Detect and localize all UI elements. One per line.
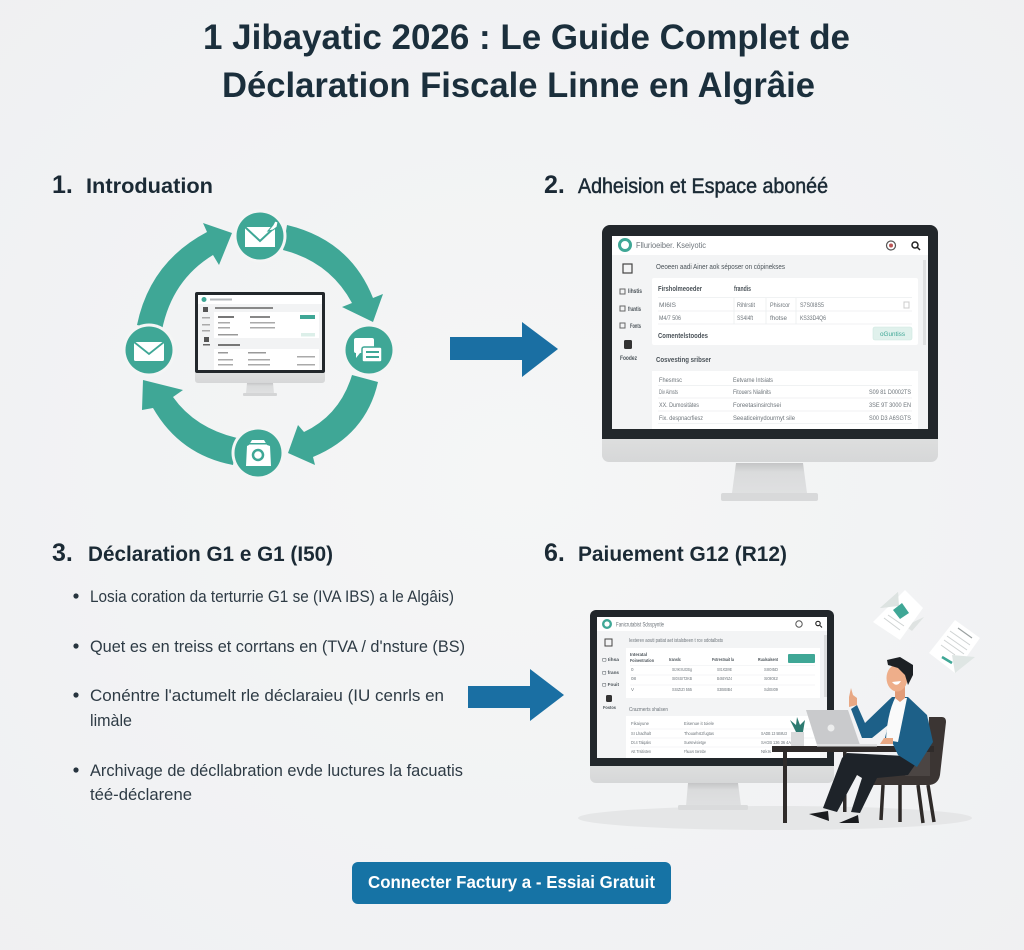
payment screen: SAGB 136 36 4A <box>761 740 791 745</box>
payment screen: ▢ Fouit <box>602 682 620 687</box>
bullet 4 <box>73 762 463 804</box>
floating document 1 <box>873 590 924 640</box>
data card: Comentelstoodes <box>658 333 708 340</box>
payment screen: Iranslc <box>669 657 681 662</box>
heading: section 1: Introduation <box>86 175 213 198</box>
payment screen: S0I0I2 <box>764 676 779 681</box>
payment screen: ▢ Iihsa <box>602 657 620 662</box>
title: 1 Jibayatic 2026 : Le Guide Complet de <box>203 18 850 57</box>
table card <box>652 371 918 429</box>
ground shadow <box>578 806 972 830</box>
payment screen: Fanicrutabist Sdsspyntle <box>616 622 664 628</box>
scrollbar <box>923 260 926 345</box>
payment illustration <box>578 590 980 830</box>
bullet 4: Archivage de décllabration evde luctures la facuatis <box>90 762 463 780</box>
arm <box>851 697 896 742</box>
table card: Fitouers Nialinits <box>733 389 772 396</box>
payment screen: Eisenue it toiele <box>684 721 714 726</box>
large monitor: subscriber portal <box>602 225 938 501</box>
arrow: left to top <box>137 223 232 330</box>
smile <box>892 681 901 685</box>
monitor bezel <box>602 225 938 439</box>
payment screen: Rualsalsent <box>758 657 778 662</box>
payment screen: 08 <box>631 676 637 681</box>
payment screen <box>597 617 827 758</box>
icon: bag with camera <box>232 426 284 480</box>
payment screen: Fostos <box>603 705 616 710</box>
person <box>809 657 933 823</box>
call to action button <box>352 862 671 904</box>
table card: XX. Dumositätes <box>659 402 700 409</box>
payment screen: SI Lhadhalt <box>631 731 652 736</box>
data card: KS33D4Q6 <box>800 315 826 322</box>
heading: section 2: Adheision et Espace abonéé <box>578 175 828 198</box>
payment screen: SdISI09 <box>764 687 778 692</box>
title: Déclaration Fiscale Linne en Algrâie <box>222 66 815 105</box>
payment screen: Fstrestnait la <box>712 657 734 662</box>
data card: fhotse <box>770 315 787 322</box>
arrow: bottom to left <box>142 380 237 465</box>
bullet 3: limàle <box>90 712 132 730</box>
sidebar: Fonts <box>630 324 641 330</box>
monitor base <box>721 493 818 501</box>
data card: MI6IS <box>659 302 677 309</box>
bullet 4: téé-déclarene <box>90 786 192 804</box>
monitor bezel <box>590 610 834 766</box>
monitor chin <box>590 766 834 783</box>
payment screen: Interatal <box>630 652 647 657</box>
data card: frandis <box>734 286 751 293</box>
arrow: right to bottom <box>288 375 378 465</box>
arrow: cycle to portal <box>450 322 558 377</box>
bullet 1: Losia coration da terturrie G1 se (IVA IBS) a le Algâis) <box>90 588 454 606</box>
monitor base <box>678 805 748 810</box>
sidebar: Foodez <box>620 355 638 362</box>
payment screen: V <box>631 687 634 692</box>
heading: section 1 <box>52 171 213 199</box>
torso jacket <box>892 697 933 767</box>
hair <box>887 657 913 685</box>
sidebar: Iihstis <box>628 289 643 295</box>
table card: Fix. despnacrfiesz <box>659 415 703 422</box>
desk <box>772 746 934 823</box>
arrow: top to right <box>283 225 383 322</box>
heading: section 3: 3. <box>52 539 73 567</box>
payment screen: Suetevisietge <box>684 740 706 745</box>
monitor stand <box>732 463 807 493</box>
icon: envelope <box>122 324 176 376</box>
top bar: Fllurioeiber. Kseiyotic <box>636 241 706 250</box>
bullet list <box>73 588 465 804</box>
legs <box>823 753 915 813</box>
data card: SS4I4ft <box>737 315 753 322</box>
sidebar: frantis <box>628 307 641 313</box>
table card: Foreetasinsirchsei <box>733 402 781 409</box>
bullet 2: Quet es en treiss et corrtans en (TVA / d'nsture (BS) <box>90 638 465 656</box>
shirt <box>886 698 907 742</box>
screen heading: Oeoeen aadi Ainer aok séposer on cópinekses <box>656 262 785 271</box>
hand on laptop <box>880 738 893 744</box>
top bar <box>612 236 928 255</box>
heading: section 2 <box>544 171 828 199</box>
payment screen: S01Xt2I9E <box>717 667 732 672</box>
second heading: Cosvesting sribser <box>656 355 711 364</box>
neck <box>895 686 905 702</box>
payment screen: Thouarhstzfugtas <box>684 731 715 736</box>
heading: section 3: Déclaration G1 e G1 (I50) <box>88 543 333 566</box>
floating document 2 <box>929 620 980 673</box>
heading: section 6: 6. <box>544 539 565 567</box>
payment screen: AIt Trsitisten <box>631 749 651 754</box>
data card: Firsholmeoeder <box>658 286 702 293</box>
payment screen: Foinentration <box>630 658 654 663</box>
payment screen: Dt.4 Talqaks <box>631 740 652 745</box>
payment screen: Crazmerts shalsen <box>629 707 668 713</box>
data card: M4/7 506 <box>659 315 681 322</box>
data card: Rihlrstit <box>737 302 755 309</box>
payment screen: 0 <box>631 667 634 672</box>
payment screen: Fikaiyune <box>631 721 649 726</box>
data card: Phisrcor <box>770 302 791 309</box>
head <box>886 664 908 692</box>
payment screen: S3BIBIB4 <box>717 687 732 692</box>
heading: section 6: Paiuement G12 (R12) <box>578 543 787 566</box>
payment screen: SII0I5D <box>764 667 779 672</box>
plant <box>790 717 805 746</box>
raised hand <box>849 688 857 707</box>
sidebar <box>620 264 643 362</box>
payment screen: SADB 13 5B8U3 <box>761 731 787 736</box>
table card: Div Aimsts <box>659 389 678 396</box>
payment screen: Iesterev aouti patiat aet istalsbeen t rce sdotalbsts <box>629 638 723 644</box>
table card: 3SE 9T 3000 EN <box>869 402 911 409</box>
table card: Eetvarne Intsiats <box>733 377 774 384</box>
icon: chat documents <box>342 324 396 376</box>
data card <box>652 278 918 345</box>
cycle diagram <box>122 210 396 480</box>
call to action button: Connecter Factury a - Essiai Gratuit <box>368 872 655 892</box>
shoes <box>809 811 859 823</box>
table card: S00 D3 A6SGTS <box>869 415 912 422</box>
payment screen: B465Y5Z4 <box>717 676 732 681</box>
payment screen: SI0SSIT2KB <box>672 676 692 681</box>
monitor chin <box>602 439 938 462</box>
table card: S09 81 D0002TS <box>869 389 912 396</box>
title <box>203 18 850 105</box>
payment screen: ▢ frans <box>602 670 620 675</box>
portal screen <box>612 236 928 429</box>
chair <box>870 717 946 823</box>
data card: S7S0I8S5 <box>800 302 824 309</box>
table card: Fhesmsc <box>659 377 683 384</box>
data card: oGuntiss <box>880 331 906 338</box>
table card: Seeaticeinydourmyt sile <box>733 415 795 422</box>
heading: section 2: 2. <box>544 171 565 199</box>
small monitor <box>195 292 325 396</box>
arrow: declaration to payment <box>468 669 564 721</box>
bullet 3: Conéntre l'actumelt rle déclaraieu (IU cenrls en <box>90 687 444 705</box>
payment screen: SIzIKSUt3Sg <box>672 667 692 672</box>
payment screen: NIkIs <box>761 749 772 754</box>
monitor stand <box>686 783 741 806</box>
payment screen: SSIZIZI 555 <box>672 687 692 692</box>
payment screen: Fhuavs Serssbe <box>684 749 706 754</box>
bullet 3 <box>73 687 444 730</box>
laptop <box>806 710 877 746</box>
icon: envelope with pointer <box>234 210 286 262</box>
heading: section 1: 1. <box>52 171 73 199</box>
